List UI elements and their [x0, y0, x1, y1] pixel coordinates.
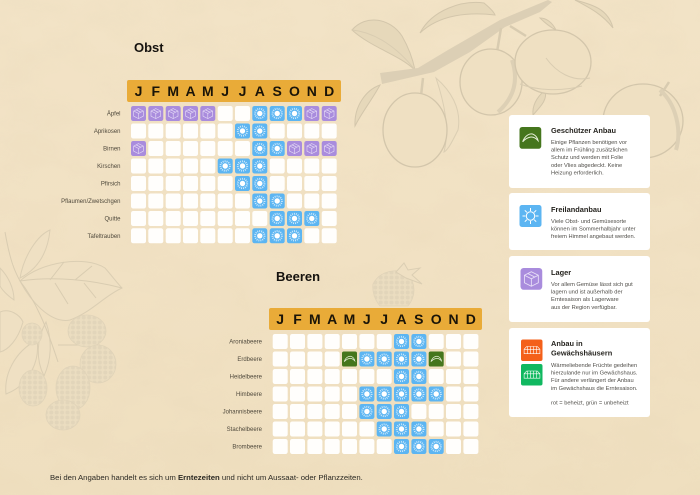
panel: Anbau in Gewächshäusern — [509, 328, 650, 417]
row: Birnen — [103, 141, 337, 156]
heading: Obst: Obst — [134, 40, 164, 55]
month header: F — [293, 311, 302, 327]
row: Heidelbeere — [230, 369, 478, 384]
text: Lager: Vor allem Gemüse lässt sich gut — [551, 282, 633, 288]
text: Freilandanbau: können im Sommerhalbjahr unter — [551, 227, 636, 233]
icon: tunnel — [520, 127, 541, 149]
month header: A — [185, 83, 196, 99]
row: Brombeere — [232, 439, 478, 454]
text: Anbau in Gewächshäusern: hierzulande nur im Gewächshaus. — [551, 371, 638, 377]
row: Birnen: Birnen — [103, 146, 120, 152]
month header: O — [431, 311, 442, 327]
month header: J — [276, 311, 284, 327]
panel: Freilandanbau — [509, 193, 650, 250]
row: Kirschen: Kirschen — [97, 164, 120, 170]
month header: S — [414, 311, 423, 327]
month header — [127, 80, 341, 102]
month header: J — [380, 311, 388, 327]
text: Freilandanbau: Viele Obst- und Gemüsesorte — [551, 219, 626, 225]
month header: A — [327, 311, 337, 327]
panel: Lager — [509, 256, 650, 322]
text: Lager: Erntesaison als Lagerware — [551, 297, 619, 303]
row: Aprikosen: Aprikosen — [94, 129, 120, 135]
text: Geschützer Anbau: oder Vlies abgedeckt. Keine — [551, 163, 622, 169]
month header: D — [324, 83, 334, 99]
month header: D — [466, 311, 476, 327]
illustration: plum branch — [352, 0, 683, 167]
icon: unheated greenhouse — [521, 364, 542, 386]
heading: Freilandanbau: Freilandanbau — [551, 205, 602, 214]
row: Himbeere: Himbeere — [236, 392, 263, 398]
icon: box — [520, 268, 542, 290]
row: Aroniabeere: Aroniabeere — [229, 340, 263, 346]
text: Geschützer Anbau: Heizung erforderlich. — [551, 170, 604, 176]
chart: Beeren — [223, 308, 482, 454]
month header: A — [396, 311, 407, 327]
row: Erdbeere: Erdbeere — [237, 357, 263, 363]
month header: F — [152, 83, 161, 99]
illustration: blackberries — [0, 230, 122, 430]
row: Tafeltrauben — [87, 228, 337, 243]
icon: sun — [520, 205, 542, 227]
row: Erdbeere — [237, 352, 478, 366]
row: Pflaumen/Zwetschgen — [61, 194, 337, 208]
row: Aroniabeere — [229, 334, 478, 349]
heading: Lager: Lager — [551, 268, 571, 277]
month header: J — [363, 311, 371, 327]
row: Johannisbeere — [223, 404, 478, 419]
row: Äpfel: Äpfel — [107, 110, 120, 118]
row: Pflaumen/Zwetschgen: Pflaumen/Zwetschgen — [61, 199, 120, 205]
month header — [269, 308, 482, 330]
heading: Anbau in Gewächshäusern: Gewächshäusern — [551, 348, 613, 358]
month header: M — [202, 83, 214, 99]
row: Quitte: Quitte — [104, 216, 121, 222]
month header: M — [167, 83, 179, 99]
row: Heidelbeere: Heidelbeere — [230, 374, 263, 380]
month header: J — [239, 83, 246, 99]
month header: O — [289, 83, 300, 99]
text: Geschützer Anbau: Schutz und werden mit Folie — [551, 155, 623, 161]
footnote: Bei den Angaben handelt es sich um Erntezeiten und nicht um Aussaat- oder Pflanzzeiten. — [50, 473, 363, 482]
month header: J — [135, 83, 142, 99]
heading: Anbau in Gewächshäusern: Anbau in — [551, 339, 583, 348]
month header: N — [448, 311, 459, 327]
row: Tafeltrauben: Tafeltrauben — [87, 234, 120, 240]
row: Stachelbeere: Stachelbeere — [227, 427, 263, 433]
row: Äpfel — [107, 106, 337, 121]
month header: N — [307, 83, 317, 99]
month header: J — [221, 83, 229, 99]
text: Geschützer Anbau: allem im Frühling zusätzlichen — [551, 148, 628, 154]
month header: S — [273, 83, 282, 99]
illustration: strawberry — [373, 263, 422, 306]
row: Kirschen — [97, 158, 337, 174]
row: Aprikosen — [94, 124, 337, 138]
row: Brombeere: Brombeere — [232, 444, 263, 450]
text: Anbau in Gewächshäusern: Für andere verlängert der Anbau — [551, 378, 634, 384]
text: Lager: lagern und ist außerhalb der — [551, 290, 623, 296]
text: Anbau in Gewächshäusern: im Gewächshaus die Erntesaison. — [551, 386, 638, 392]
row: Quitte — [104, 211, 337, 226]
text: Geschützer Anbau: Einige Pflanzen benötigen vor — [551, 140, 627, 146]
row: Himbeere — [236, 386, 478, 402]
row: Johannisbeere: Johannisbeere — [223, 410, 263, 416]
row: Stachelbeere — [227, 422, 478, 436]
heading: Geschützer Anbau: Geschützer Anbau — [551, 126, 617, 135]
month header: M — [344, 311, 355, 327]
text: Anbau in Gewächshäusern: Wärmeliebende Früchte gedeihen — [551, 363, 637, 369]
month header: M — [309, 311, 321, 327]
icon: heated greenhouse — [521, 340, 542, 361]
text: Freilandanbau: freiem Himmel angebaut werden. — [551, 234, 636, 240]
row: Pfirsich: Pfirsich — [101, 182, 120, 188]
text: Lager: aus der Region verfügbar. — [551, 305, 617, 311]
heading: Beeren: Beeren — [276, 269, 320, 284]
month header: A — [255, 83, 265, 99]
row: Pfirsich — [101, 176, 337, 191]
chart: Obst — [61, 80, 341, 243]
note: colour key: rot = beheizt, grün = unbeheizt — [551, 400, 629, 406]
panel: Geschützer Anbau — [509, 115, 650, 188]
